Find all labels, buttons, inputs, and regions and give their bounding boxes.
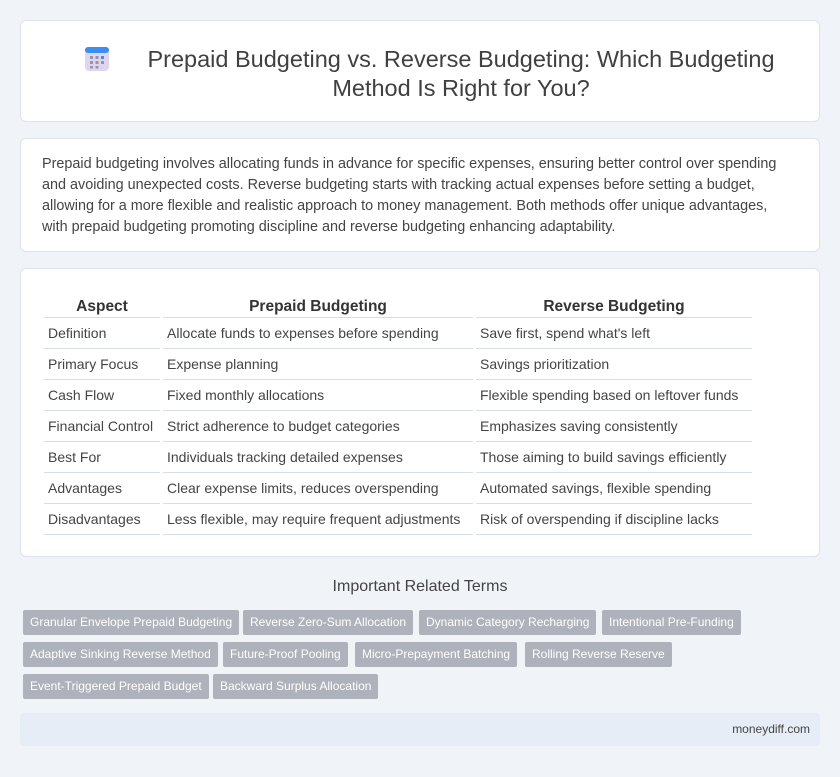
comparison table: Risk of overspending if discipline lacks <box>480 511 719 527</box>
intro text card: allowing for a more flexible and realistic approach to money management. Both methods offer unique advantages, <box>42 198 767 214</box>
footer <box>20 713 820 746</box>
comparison table: Reverse Budgeting <box>543 298 685 314</box>
comparison table: Clear expense limits, reduces overspending <box>167 480 439 496</box>
comparison table: Best For <box>48 449 101 465</box>
comparison table: Aspect <box>76 298 128 314</box>
related terms tags: Granular Envelope Prepaid Budgeting <box>30 615 232 629</box>
intro text card: Prepaid budgeting involves allocating funds in advance for specific expenses, ensuring better control over spending <box>42 156 776 172</box>
comparison table: Automated savings, flexible spending <box>480 480 711 496</box>
related terms tags: Backward Surplus Allocation <box>220 679 371 693</box>
icon: calendar <box>85 47 109 71</box>
related terms tags: Future-Proof Pooling <box>230 647 341 661</box>
related terms tags: Event-Triggered Prepaid Budget <box>30 679 202 693</box>
comparison table: Cash Flow <box>48 387 114 403</box>
comparison table: Those aiming to build savings efficiently <box>480 449 726 465</box>
comparison table: Flexible spending based on leftover funds <box>480 387 738 403</box>
intro text card: with prepaid budgeting promoting discipline and reverse budgeting enhancing adaptability. <box>42 219 615 235</box>
title: Prepaid Budgeting vs. Reverse Budgeting: Which Budgeting Method Is Right for You? <box>147 46 775 101</box>
comparison table: Less flexible, may require frequent adjustments <box>167 511 460 527</box>
related terms tags: Reverse Zero-Sum Allocation <box>250 615 406 629</box>
comparison table <box>44 298 752 535</box>
related terms heading: Important Related Terms <box>333 578 507 595</box>
comparison table: Expense planning <box>167 356 278 372</box>
comparison table: Savings prioritization <box>480 356 609 372</box>
comparison table: Primary Focus <box>48 356 138 372</box>
related terms tags: Intentional Pre-Funding <box>609 615 734 629</box>
comparison table: Save first, spend what's left <box>480 325 650 341</box>
comparison table: Advantages <box>48 480 122 496</box>
intro text card <box>20 138 820 252</box>
comparison table: Individuals tracking detailed expenses <box>167 449 403 465</box>
comparison table: Definition <box>48 325 106 341</box>
comparison table: Allocate funds to expenses before spending <box>167 325 439 341</box>
comparison table: Financial Control <box>48 418 153 434</box>
related terms tags: Rolling Reverse Reserve <box>532 647 665 661</box>
intro text card: and avoiding unexpected costs. Reverse budgeting starts with tracking actual expenses before setting a budget, <box>42 177 755 193</box>
related terms tags: Micro-Prepayment Batching <box>362 647 510 661</box>
comparison table: Fixed monthly allocations <box>167 387 324 403</box>
comparison table: Disadvantages <box>48 511 141 527</box>
footer: moneydiff.com <box>732 722 810 736</box>
related terms tags: Adaptive Sinking Reverse Method <box>30 647 211 661</box>
comparison table card <box>20 268 820 557</box>
comparison table: Prepaid Budgeting <box>249 298 387 314</box>
comparison table: Emphasizes saving consistently <box>480 418 678 434</box>
header card <box>20 20 820 122</box>
related terms tags: Dynamic Category Recharging <box>426 615 589 629</box>
comparison table: Strict adherence to budget categories <box>167 418 400 434</box>
